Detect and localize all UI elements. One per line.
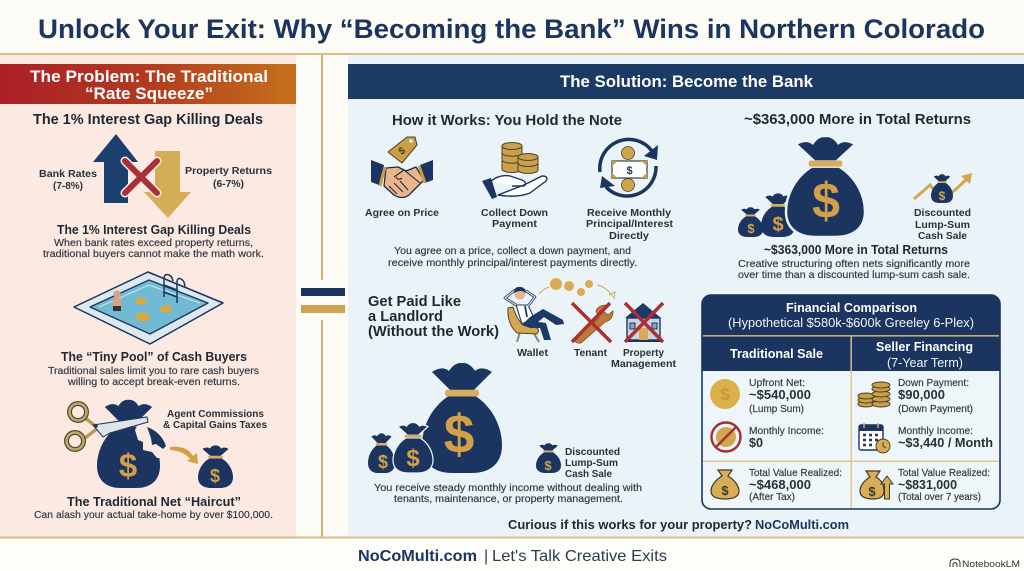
cell: seller total value: Total Value Realized:: [898, 467, 990, 479]
text: interest gap explanation: When bank rates exceed property returns,: [54, 237, 253, 249]
label: receive monthly: Directly: [609, 230, 649, 242]
text: tiny pool: The “Tiny Pool” of Cash Buyers: [61, 350, 247, 364]
panel: the solution: [348, 55, 1024, 537]
table title: (Hypothetical $580k-$600k Greeley 6-Plex): [728, 316, 974, 330]
icon: property crossed out: [625, 303, 663, 342]
text: how it works description: receive monthly principal/interest payments directly.: [388, 257, 637, 269]
cell: seller monthly income: ~$3,440 / Month: [898, 435, 993, 450]
cell: monthly income zero: [712, 422, 824, 452]
heading: how it works: How it Works: You Hold the Note: [392, 112, 622, 129]
column header: traditional sale: Traditional Sale: [730, 346, 823, 361]
icon: money bag group: $: [406, 445, 420, 472]
text: total returns description: Creative structuring often nets significantly more: [738, 258, 970, 270]
label: receive monthly: [586, 207, 674, 242]
label: discounted cash sale: Lump-Sum: [915, 219, 970, 231]
footer: [358, 548, 667, 565]
heading: get paid like a landlord: [368, 293, 499, 340]
cell: upfront net: Upfront Net:: [749, 377, 805, 389]
label: receive monthly: Principal/Interest: [586, 218, 674, 230]
solution header: The Solution: Become the Bank: [560, 73, 814, 91]
icon: relaxed man with coins: [505, 278, 615, 342]
icon: monthly payment cycle: [600, 139, 658, 196]
cell: seller total value: [860, 467, 990, 503]
cell: upfront net: $: [720, 385, 730, 404]
cell: down payment: [858, 377, 973, 415]
cell: seller total value: (Total over 7 years): [898, 492, 981, 503]
text: tiny pool: willing to accept break-even returns.: [67, 376, 240, 388]
icon: equals sign: [301, 288, 345, 313]
panel: the problem: [0, 55, 296, 537]
cell: down payment: $90,000: [898, 387, 945, 402]
label: property management: Management: [611, 358, 677, 370]
cell: down payment: (Down Payment): [898, 404, 973, 415]
text: net haircut: Can alash your actual take-home by over $100,000.: [34, 509, 273, 521]
table title: Financial Comparison: [786, 301, 917, 315]
call to action: NoCoMulti.com: [755, 518, 849, 532]
icon: scissors cutting money bag: $: [119, 447, 137, 484]
column header: seller financing: [876, 339, 973, 370]
column header: seller financing: (7-Year Term): [887, 356, 963, 370]
text: total returns description: ~$363,000 More in Total Returns: [764, 243, 948, 257]
icon: scissors cutting money bag: [66, 400, 172, 488]
text: interest gap explanation: traditional buyers cannot make the math work.: [43, 248, 264, 260]
cell: seller total value: $: [868, 484, 876, 499]
text: steady monthly income: tenants, maintenance, or property management.: [394, 493, 623, 505]
icon: coins over hand: [482, 142, 547, 199]
icon: monthly payment cycle: $: [626, 165, 633, 177]
icon: rate arrows crossed: [93, 134, 191, 218]
cell: upfront net: [710, 377, 811, 415]
divider: vertical gold rule: [321, 55, 323, 537]
icon: handshake and price tag: [371, 137, 433, 198]
text: interest gap explanation: [43, 223, 264, 260]
text: steady monthly income: You receive steady monthly income without dealing with: [374, 482, 642, 494]
icon: money bag group: [368, 363, 502, 473]
icon: money bag group: $: [378, 452, 388, 472]
label: discounted cash sale: Discounted: [565, 446, 620, 458]
cell: upfront net: ~$540,000: [749, 387, 811, 402]
text: how it works description: [388, 245, 637, 269]
label: property returns: Property Returns: [185, 165, 272, 177]
watermark: NotebookLM: NotebookLM: [962, 559, 1020, 570]
label: discounted cash sale: [914, 207, 971, 242]
icon: small bag with rising arrow: [914, 173, 972, 203]
heading: get paid like a landlord: (Without the Work): [368, 323, 499, 340]
table title: [702, 295, 1000, 371]
icon: handshake and price tag: $: [397, 145, 408, 157]
label: bank rates: (7-8%): [53, 180, 83, 192]
label: discounted cash sale: Lump-Sum: [565, 457, 618, 469]
icon: small money bag: $: [544, 458, 552, 473]
label: collect down payment: Collect Down: [481, 207, 548, 219]
icon: growing money bags: $: [812, 173, 840, 229]
problem header: The Problem: The Traditional: [30, 68, 268, 86]
text: tiny pool: [48, 350, 259, 388]
title: Unlock Your Exit: Why “Becoming the Bank” Wins in Northern Colorado: [38, 14, 985, 44]
cell: traditional total value: Total Value Realized:: [749, 467, 842, 479]
label: collect down payment: Payment: [492, 218, 538, 230]
icon: small money bag: [536, 443, 561, 473]
icon: small money bag: $: [210, 466, 220, 486]
footer: Let's Talk Creative Exits: [492, 548, 667, 565]
column header: seller financing: Seller Financing: [876, 339, 973, 354]
cell: traditional total value: $: [721, 483, 729, 498]
call to action: [508, 518, 849, 532]
heading: get paid like a landlord: a Landlord: [368, 308, 443, 325]
cell: seller monthly income: [859, 423, 993, 453]
icon: small bag with rising arrow: $: [939, 189, 946, 203]
cell: seller monthly income: Monthly Income:: [898, 425, 973, 437]
text: how it works description: You agree on a price, collect a down payment, and: [394, 245, 631, 257]
text: tiny pool: Traditional sales limit you to rare cash buyers: [48, 365, 259, 377]
cell: traditional total value: (After Tax): [749, 492, 795, 503]
text: total returns description: [738, 243, 970, 281]
label: receive monthly: Receive Monthly: [587, 207, 671, 219]
label: bank rates: Bank Rates: [39, 168, 97, 180]
arrow: to smaller bag: [170, 447, 198, 464]
label: property returns: [185, 165, 272, 190]
label: agree on price: Agree on Price: [365, 207, 439, 219]
label: tenant: Tenant: [574, 347, 607, 359]
icon: money bag group: $: [444, 403, 474, 465]
label: discounted cash sale: [565, 446, 620, 480]
icon: growing money bags: $: [772, 214, 784, 236]
heading: get paid like a landlord: Get Paid Like: [368, 293, 461, 310]
label: wallet: Wallet: [517, 347, 549, 359]
cell: monthly income zero: $0: [749, 435, 763, 450]
text: net haircut: The Traditional Net “Haircut”: [67, 495, 241, 509]
problem header: “Rate Squeeze”: [85, 85, 213, 103]
call to action: Curious if this works for your property?: [508, 518, 752, 532]
icon: growing money bags: $: [747, 221, 755, 236]
table: financial comparison: [702, 295, 1000, 509]
icon: small money bag: [198, 445, 233, 488]
text: total returns description: over time than a discounted lump-sum cash sale.: [738, 269, 970, 281]
label: commissions and taxes: Agent Commissions: [167, 408, 264, 420]
cell: seller total value: ~$831,000: [898, 477, 957, 492]
solution header: [348, 64, 1024, 99]
cell: traditional total value: [711, 467, 842, 503]
text: interest gap explanation: The 1% Interest Gap Killing Deals: [57, 223, 251, 237]
label: property returns: (6-7%): [213, 178, 244, 190]
label: discounted cash sale: Discounted: [914, 207, 971, 219]
label: bank rates: [39, 168, 97, 192]
text: net haircut: [34, 495, 273, 521]
cell: upfront net: (Lump Sum): [749, 404, 804, 415]
footer: |: [484, 548, 488, 565]
label: commissions and taxes: & Capital Gains Taxes: [163, 419, 267, 431]
cell: traditional total value: ~$468,000: [749, 477, 811, 492]
icon: wrench crossed out: [572, 303, 613, 343]
problem header: [0, 64, 296, 104]
icon: growing money bags: [738, 136, 865, 237]
text: steady monthly income: [374, 482, 642, 505]
label: property management: Property: [623, 347, 664, 359]
cell: down payment: Down Payment:: [898, 377, 969, 389]
heading: total returns: ~$363,000 More in Total Returns: [744, 111, 971, 128]
label: property management: [611, 347, 677, 370]
cell: monthly income zero: Monthly Income:: [749, 425, 824, 437]
label: discounted cash sale: Cash Sale: [918, 230, 967, 242]
label: commissions and taxes: [163, 408, 267, 431]
icon: tiny pool: [74, 272, 223, 344]
footer: NoCoMulti.com: [358, 548, 477, 565]
label: discounted cash sale: Cash Sale: [565, 468, 612, 480]
heading: interest gap: The 1% Interest Gap Killing Deals: [33, 111, 263, 128]
label: collect down payment: [481, 207, 548, 230]
